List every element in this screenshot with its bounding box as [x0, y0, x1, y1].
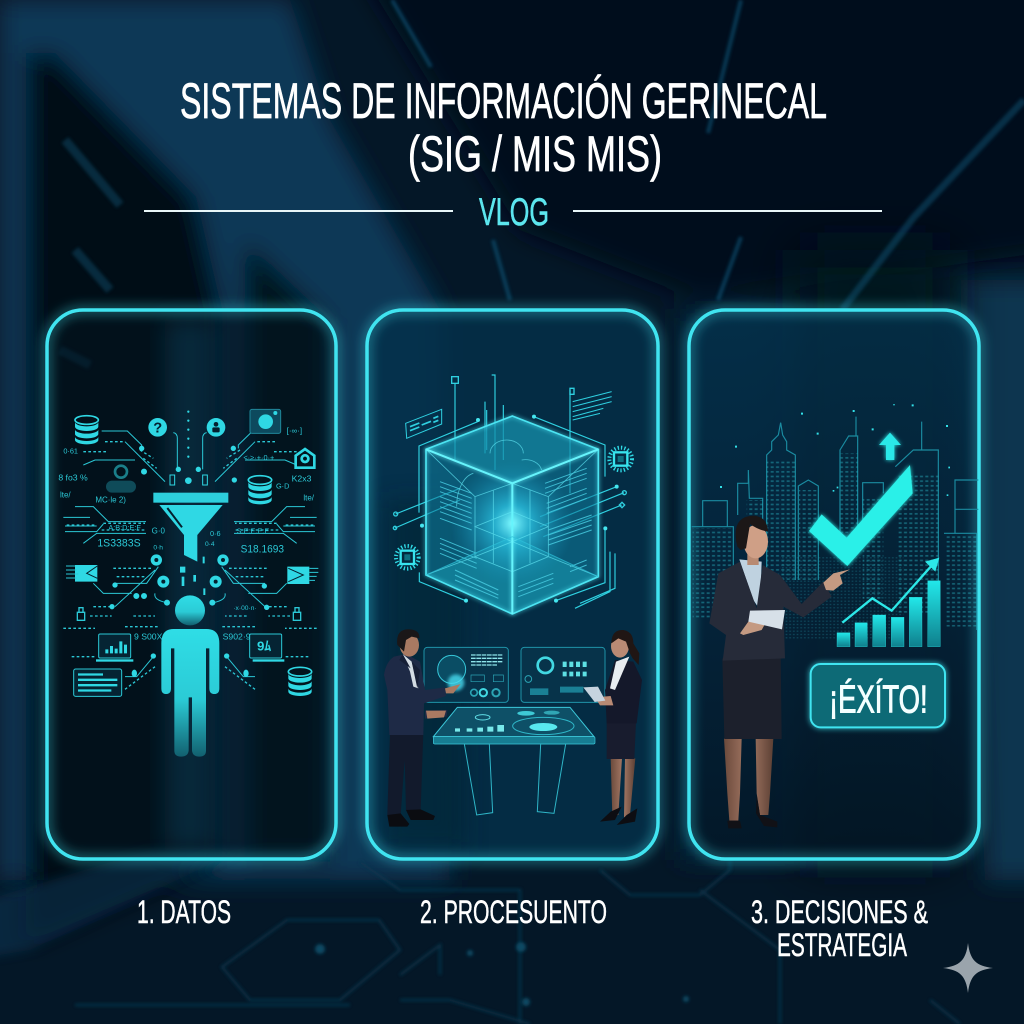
- icon: database top left: [75, 416, 98, 444]
- subtitle: vlog with rules: VLOG: [479, 191, 549, 234]
- trend arrow: [842, 558, 939, 623]
- icon: mail cards: [66, 565, 318, 584]
- small code text: 8 fo3 %: [58, 473, 88, 483]
- icon: home: [296, 449, 314, 468]
- man in suit: [384, 629, 461, 827]
- small code text: [·∞·]: [287, 426, 302, 435]
- businesswoman pointing: [709, 516, 850, 828]
- icon: data cube: [426, 416, 598, 614]
- icon: question circle: ?: [153, 421, 162, 437]
- cube inner grid: [426, 440, 598, 577]
- small code text: MC·le 2): [95, 496, 126, 505]
- icon: laptops with charts: [96, 634, 284, 662]
- icon: funnel: [153, 493, 228, 562]
- panel 1: datos: [47, 310, 336, 859]
- icon: question circle: [148, 418, 167, 437]
- label: step 3: ESTRATEGIA: [777, 927, 907, 963]
- circuit traces: [395, 375, 624, 608]
- success badge: ¡ÉXÍTO!: [829, 677, 928, 721]
- small code text: 0·61: [63, 446, 78, 455]
- icon: small memory card: [406, 409, 442, 438]
- small code text: A:B:D:E:F: [108, 523, 141, 532]
- icon: gears: [106, 466, 136, 493]
- icon: image card: [250, 409, 281, 433]
- success badge: [811, 664, 945, 727]
- city skyline: [692, 404, 978, 640]
- circuit lines: [63, 431, 317, 689]
- icon: database bottom right: [288, 667, 312, 696]
- small code text: 1S3383S: [97, 538, 141, 550]
- woman with tablet: [583, 630, 642, 825]
- icon: chips: [396, 448, 632, 569]
- small code text: 0·4: [205, 541, 215, 548]
- small code text: lte/: [303, 494, 315, 503]
- title: (SIG / MIS MIS): [408, 126, 662, 182]
- document lines top right: [573, 392, 612, 420]
- label: step 2: 2. PROCESUENTO: [420, 894, 607, 930]
- small code text: S902·9: [223, 631, 251, 641]
- dashboard screen left: [424, 647, 508, 702]
- small code text: <·>·+·0·+: [243, 453, 274, 462]
- icon: person silhouette: [161, 595, 219, 757]
- icons: locks: [77, 608, 301, 620]
- small code text: 0·6: [210, 529, 221, 538]
- icon: user circle: [207, 418, 225, 437]
- panel 3: decisiones: [689, 310, 979, 859]
- dashboard screen right: [521, 647, 605, 702]
- small code text: [58, 426, 315, 641]
- small code text: ·x·00·n·: [233, 605, 257, 612]
- icon: check mark: [809, 465, 913, 566]
- label: step 3: 3. DECISIONES &: [751, 894, 928, 930]
- icon: database right: [248, 476, 272, 504]
- small code text: S18.1693: [241, 544, 284, 556]
- icon: sparkle watermark: [943, 943, 993, 993]
- icon: laptops with charts: 9ﾑ: [257, 639, 271, 654]
- holographic table: [433, 707, 595, 815]
- icons: gear nodes: [151, 554, 229, 588]
- bar chart: [837, 581, 940, 647]
- title: [180, 73, 827, 182]
- node dots: [109, 446, 269, 677]
- center dotted stream: [185, 412, 192, 457]
- label: step 1: 1. DATOS: [137, 894, 231, 930]
- cube document text: [440, 468, 592, 598]
- panel 2: procesamiento: [367, 310, 658, 859]
- icon: text card: [74, 669, 122, 696]
- small code text: G·D: [276, 481, 289, 490]
- small code text: S:E:E:E:E: [237, 526, 269, 535]
- small code text: 9 S00X: [134, 631, 163, 641]
- small code text: lte/: [60, 490, 71, 499]
- small code text: G·0: [152, 526, 166, 535]
- label: step 3: [751, 894, 928, 963]
- small code text: K2x3: [292, 474, 312, 484]
- icon: up arrow: [879, 433, 901, 460]
- data network illustration: [58, 409, 318, 757]
- small code text: 0·h: [153, 544, 163, 551]
